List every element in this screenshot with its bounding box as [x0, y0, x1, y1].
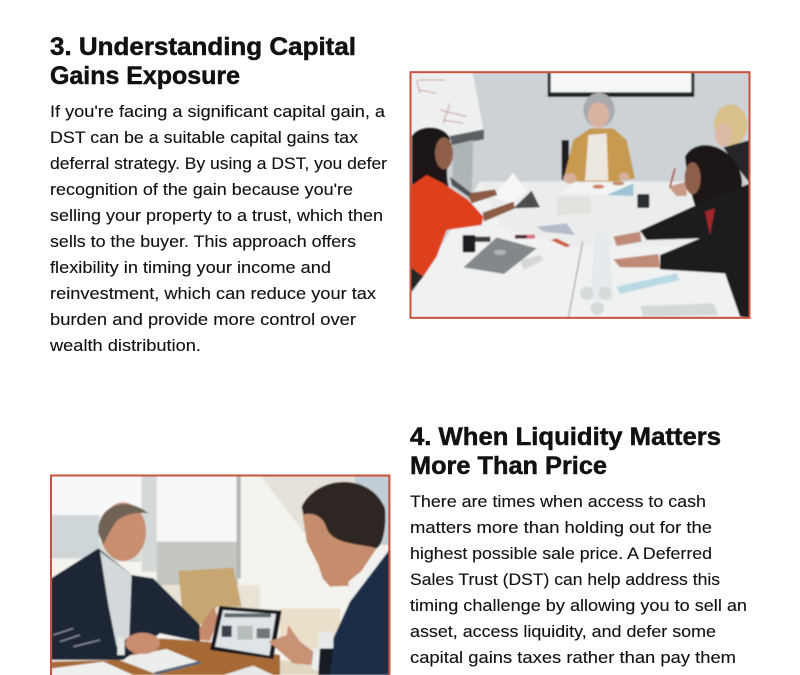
heading: understanding capital gains exposure: [50, 33, 356, 90]
body paragraph: capital gains: flexibility in timing your income and: [50, 259, 331, 277]
body paragraph: capital gains: selling your property to a trust, which then: [50, 207, 383, 225]
body paragraph: liquidity: Sales Trust (DST) can help address this: [410, 571, 720, 589]
whiteboard: [410, 72, 483, 136]
section 3 text: [49, 33, 388, 355]
chair: [178, 568, 242, 625]
body paragraph: liquidity: highest possible sale price. A Deferred: [410, 545, 712, 563]
photo: meeting around white table: [410, 71, 750, 319]
heading: when liquidity matters: 4. When Liquidity Matters: [410, 423, 721, 451]
body paragraph: liquidity: matters more than holding out for the: [410, 519, 712, 537]
windows: [51, 475, 141, 515]
man left: [51, 548, 200, 660]
section 4 text: [410, 423, 747, 667]
heading: when liquidity matters: [410, 423, 721, 480]
body paragraph: capital gains: wealth distribution.: [49, 337, 201, 355]
heading: understanding capital gains exposure: Gains Exposure: [50, 62, 240, 90]
body paragraph: capital gains: recognition of the gain because you're: [50, 181, 353, 199]
body paragraph: liquidity: [410, 493, 747, 667]
body paragraph: liquidity: capital gains taxes rather than pay them: [410, 649, 736, 667]
woman left: [412, 128, 450, 192]
table: [410, 182, 750, 318]
body paragraph: capital gains: reinvestment, which can reduce your tax: [50, 285, 377, 303]
body paragraph: capital gains: sells to the buyer. This approach offers: [50, 233, 356, 251]
heading: when liquidity matters: More Than Price: [410, 452, 607, 480]
mugs: [463, 235, 475, 252]
papers: [560, 182, 633, 195]
body paragraph: capital gains: [49, 103, 388, 355]
body paragraph: liquidity: There are times when access to cash: [410, 493, 706, 511]
heading: understanding capital gains exposure: 3. Understanding Capital: [50, 33, 356, 61]
laptop: [463, 237, 537, 274]
body paragraph: liquidity: timing challenge by allowing you to sell an: [410, 597, 747, 615]
body paragraph: capital gains: deferral strategy. By using a DST, you defer: [50, 155, 388, 173]
woman center: [562, 140, 569, 180]
photo: two men reviewing tablet: [50, 474, 391, 675]
body paragraph: capital gains: burden and provide more control over: [50, 311, 357, 329]
tablet: [210, 606, 282, 659]
woman right back: [714, 104, 747, 146]
body paragraph: capital gains: DST can be a suitable capital gains tax: [50, 129, 359, 147]
body paragraph: liquidity: asset, access liquidity, and defer some: [410, 623, 716, 641]
table: [51, 638, 280, 675]
body paragraph: capital gains: If you're facing a significant capital gain, a: [50, 103, 386, 121]
woman right front: [684, 144, 743, 207]
man right: [303, 508, 377, 587]
